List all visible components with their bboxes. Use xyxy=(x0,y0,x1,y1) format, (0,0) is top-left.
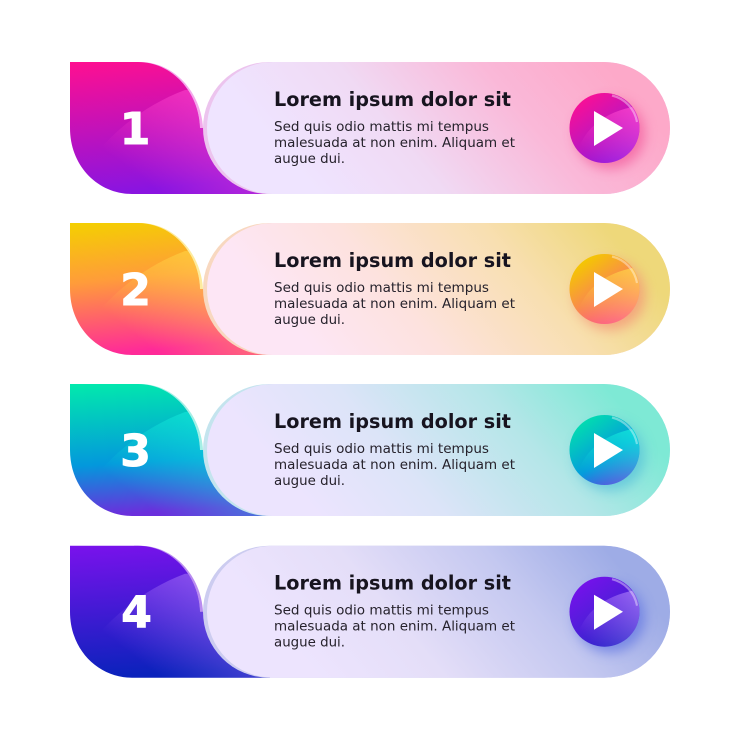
body text 2: malesuada at non enim. Aliquam et xyxy=(274,297,515,312)
pill 4 xyxy=(203,546,670,678)
banner 4 xyxy=(70,546,670,684)
body text 4: augue dui. xyxy=(274,636,345,651)
body text 3: augue dui. xyxy=(274,474,345,489)
play button 2 xyxy=(568,254,645,331)
banner 1 xyxy=(70,62,670,200)
number 1: 1 xyxy=(120,104,150,155)
number 4: 4 xyxy=(121,588,152,639)
body text 1: malesuada at non enim. Aliquam et xyxy=(274,136,515,151)
body text 3 xyxy=(274,442,515,489)
play button 4 xyxy=(568,577,645,654)
pill 3 xyxy=(203,384,670,516)
play button 3 xyxy=(568,415,645,492)
body text 2 xyxy=(274,281,515,328)
body text 4: malesuada at non enim. Aliquam et xyxy=(274,620,515,635)
play button 1 xyxy=(568,93,645,170)
body text 1: augue dui. xyxy=(274,152,345,167)
body text 1 xyxy=(274,120,515,167)
body text 4: Sed quis odio mattis mi tempus xyxy=(274,604,489,619)
body text 1: Sed quis odio mattis mi tempus xyxy=(274,120,489,135)
leaf tab 3 xyxy=(70,384,275,522)
number 2: 2 xyxy=(120,265,151,316)
heading 3: Lorem ipsum dolor sit xyxy=(274,410,511,433)
heading 2: Lorem ipsum dolor sit xyxy=(274,249,511,272)
banner 3 xyxy=(70,384,670,522)
banner 2 xyxy=(70,223,670,361)
body text 3: Sed quis odio mattis mi tempus xyxy=(274,442,489,457)
pill 2 xyxy=(203,223,670,355)
body text 2: Sed quis odio mattis mi tempus xyxy=(274,281,489,296)
leaf tab 1 xyxy=(70,62,275,200)
leaf tab 4 xyxy=(70,546,275,684)
number 3: 3 xyxy=(120,426,151,477)
body text 3: malesuada at non enim. Aliquam et xyxy=(274,458,515,473)
leaf tab 2 xyxy=(70,223,275,361)
pill 1 xyxy=(203,62,670,194)
body text 4 xyxy=(274,604,515,651)
heading 1: Lorem ipsum dolor sit xyxy=(274,88,511,111)
body text 2: augue dui. xyxy=(274,313,345,328)
heading 4: Lorem ipsum dolor sit xyxy=(274,572,511,595)
